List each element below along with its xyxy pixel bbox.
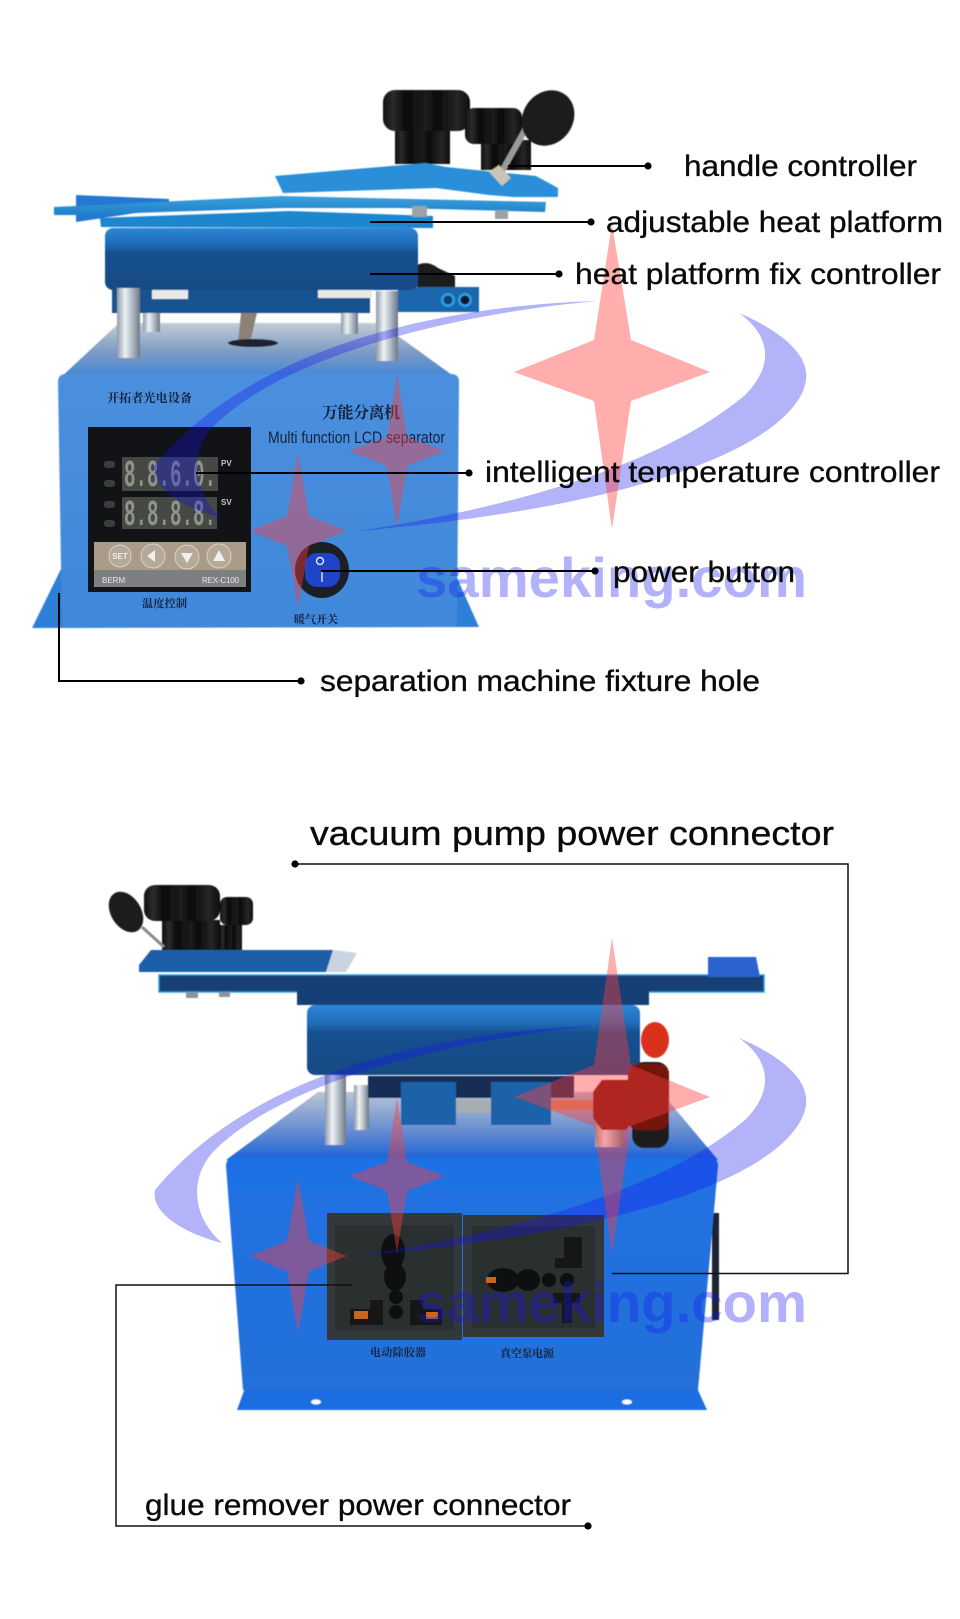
label: adjustable heat platform [606,206,943,239]
box top surface [58,323,459,380]
heater switch label: 暖气开关 [294,612,338,626]
top handle plate [139,950,357,972]
swoosh right [358,1038,806,1256]
under plate [297,990,649,1005]
swoosh left [155,1026,597,1243]
leader [321,567,599,575]
right socket [463,1215,604,1337]
main plate [54,196,546,215]
knob one [144,885,220,921]
callout: heat platform fix controller [370,258,941,291]
box top surface [226,1092,718,1160]
product name english: Multi function LCD separator [268,428,445,447]
watermark: top [155,224,807,609]
red knob upper [641,1022,669,1058]
left star [250,1178,347,1333]
leader [59,593,305,685]
spacer screws [412,206,508,219]
panel printed text [107,390,445,626]
box front panel [58,374,459,627]
leader [196,469,473,477]
middle star [349,1098,445,1253]
clamp blocks [401,1082,551,1125]
left star [250,453,347,608]
SET key text: SET [112,552,128,561]
tilted knob [511,80,585,156]
callout: separation machine fixture hole [59,593,760,698]
switch bezel [295,542,349,598]
brand text: BERM [102,576,125,585]
main plate [159,975,764,992]
temperature control label: 温度控制 [142,596,187,610]
key panel [94,542,246,572]
label: vacuum pump power connector [310,815,834,853]
knob one [383,90,470,131]
watermark text: sameking.com [416,1271,807,1334]
key arrows [147,550,225,563]
rocker [305,553,340,587]
socket panel [327,1213,604,1360]
brand strip [94,570,246,587]
cable and hole [228,313,278,347]
watermark text: sameking.com [416,546,807,609]
leader [116,1285,592,1530]
mounting flange [237,1388,707,1410]
middle star [349,373,445,528]
large star [514,938,710,1254]
callout: power button [321,556,795,589]
rear pillars [143,310,358,334]
box front panel [226,1158,718,1390]
black rear knob [632,1062,669,1148]
side clamp block [398,287,479,312]
PV digits: 8.8.6.0. [124,455,216,498]
rocker marks [316,558,324,582]
SV display [122,497,217,529]
knob two [465,108,522,144]
under plate [100,211,433,228]
right tab [708,957,760,977]
leader [370,218,595,226]
leader [370,270,563,278]
left socket [327,1213,462,1340]
tilted bolt [489,130,525,186]
swoosh right [358,313,806,531]
power switch [295,542,349,598]
label: glue remover power connector [145,1489,571,1522]
watermark: bottom [155,938,807,1334]
pillars [325,1075,623,1147]
SV label: SV [221,498,232,507]
left socket caption: 电动除胶器 [370,1345,426,1359]
red rear lobe [628,1064,669,1130]
heat platform block [307,1005,640,1075]
top handle plate [275,163,558,197]
callout: adjustable heat platform [370,206,943,239]
right socket caption: 真空泵电源 [500,1346,555,1360]
SV digits: 8.8.8.8. [124,495,216,536]
controller frame [88,427,251,592]
callout: intelligent temperature controller [196,456,940,489]
leader [508,162,652,170]
lower plate [112,290,370,313]
mounting flange [32,569,479,628]
product name chinese: 万能分离机 [322,403,400,422]
front pillars [117,288,398,361]
keys [109,544,231,569]
flange holes [311,1400,632,1404]
heat platform block [105,228,418,290]
label: heat platform fix controller [575,258,941,291]
rear tab [76,195,169,222]
model text: REX-C100 [202,576,240,585]
swoosh left [155,301,597,518]
leader [291,860,848,1274]
PV label: PV [221,459,232,468]
fix controller knob [417,263,455,287]
large star [514,224,710,529]
rear plate under block [368,1076,574,1098]
temperature controller [88,427,251,592]
right side dark edge [712,1213,719,1320]
label: handle controller [684,150,917,183]
machine photo: front view [32,80,585,628]
stems of knobs [395,128,531,170]
stems [162,920,242,950]
callout: glue remover power connector [116,1285,592,1530]
callout: handle controller [508,150,917,183]
plate bolts [186,992,230,998]
gap highlights [152,290,372,299]
company name: 开拓者光电设备 [107,390,192,405]
status lamps [104,461,115,527]
label: separation machine fixture hole [320,665,760,698]
callout: vacuum pump power connector [291,815,848,1274]
machine photo: rear view [102,885,764,1410]
label: power button [613,556,795,589]
tilted knob and bolt [102,885,164,947]
PV display [122,457,218,491]
red front knob [593,1080,636,1130]
copper rod [551,1100,595,1110]
label: intelligent temperature controller [485,456,940,489]
threaded rod [456,1100,491,1113]
knob two [220,897,253,925]
